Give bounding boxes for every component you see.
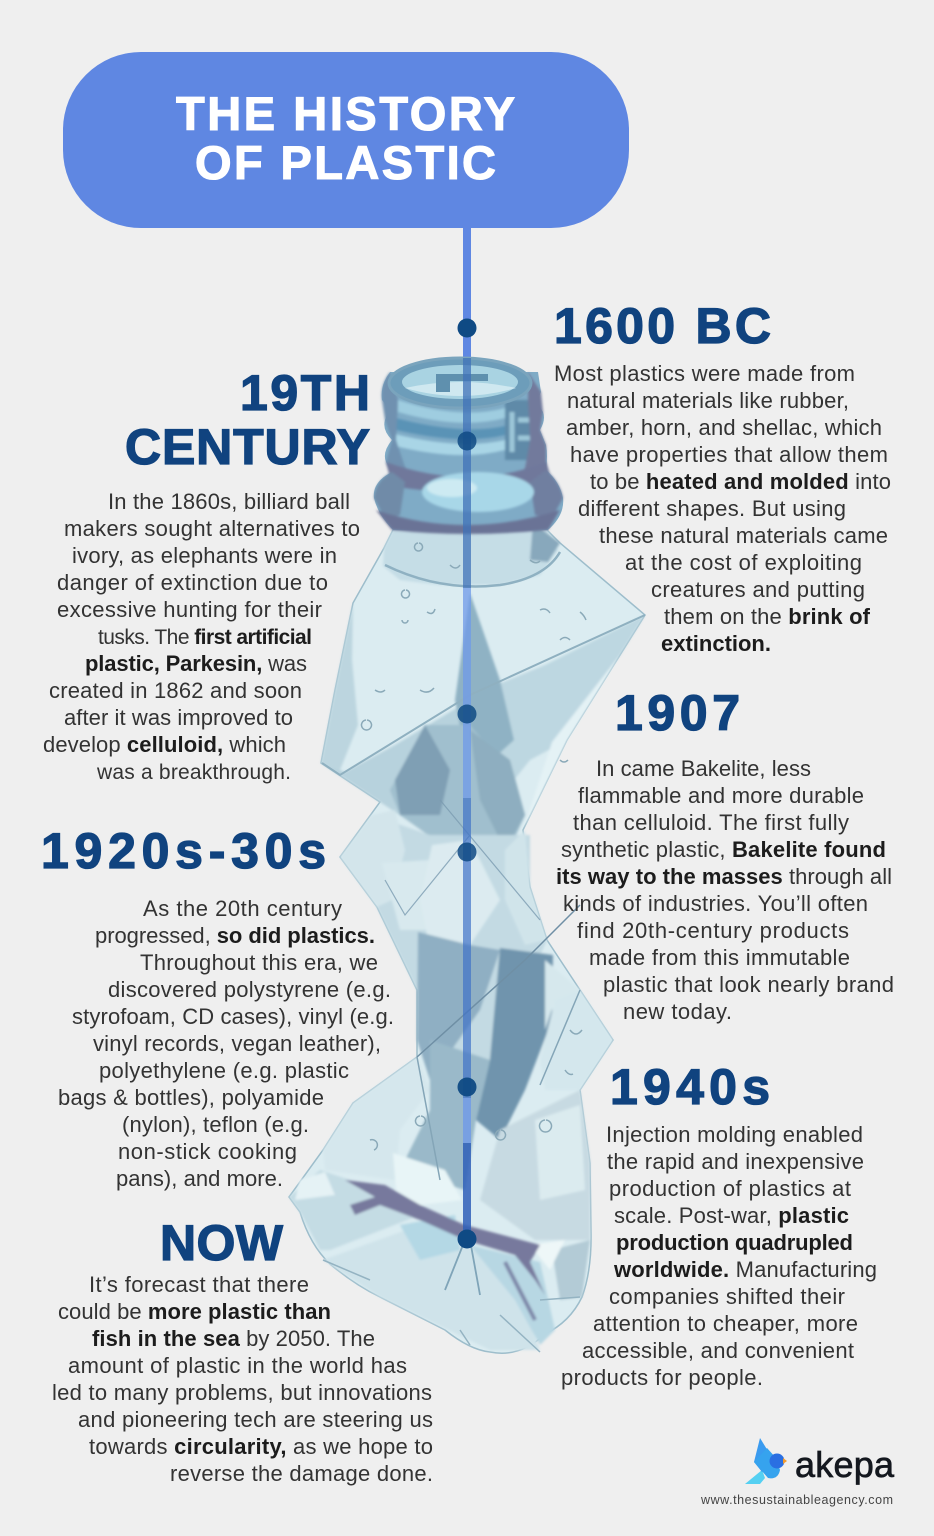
text: 1940s <box>561 1122 877 1390</box>
text: 1940s: Injection molding enabled <box>606 1122 863 1147</box>
heading: 1940s: 1940s <box>610 1059 770 1115</box>
text: now: could be more plastic than <box>58 1299 331 1324</box>
text: 1940s: production of plastics at <box>609 1176 851 1201</box>
heading: 1600 BC: 1600 BC <box>554 298 771 354</box>
text: 1600 BC: at the cost of exploiting <box>625 550 862 575</box>
thread bands <box>398 400 505 423</box>
text: 1940s: companies shifted their <box>609 1284 845 1309</box>
panel: 1940s <box>561 1059 877 1390</box>
text: 1600 BC: extinction. <box>661 631 771 656</box>
panel: 1920s-30s <box>41 823 394 1191</box>
text: 19th century: excessive hunting for their <box>57 597 322 622</box>
text: 19th century: tusks. The first artificial <box>98 626 312 649</box>
bottle mouth <box>389 358 531 408</box>
text: 19th century: plastic, Parkesin, was <box>85 651 307 676</box>
text: 1907: flammable and more durable <box>578 783 864 808</box>
heading: now: NOW <box>160 1215 284 1271</box>
text: 1600 BC: have properties that allow them <box>570 442 888 467</box>
text: 1600 BC: natural materials like rubber, <box>567 388 849 413</box>
text: 1920s-30s: discovered polystyrene (e.g. <box>108 977 391 1002</box>
logo: akepa <box>700 1438 895 1507</box>
text: 1920s-30s: As the 20th century <box>143 896 342 921</box>
left dark edge <box>382 372 406 472</box>
text: 1600 BC: them on the brink of <box>664 604 871 629</box>
text: now: amount of plastic in the world has <box>68 1353 407 1378</box>
text: 1940s: scale. Post-war, plastic <box>614 1203 849 1228</box>
text: 1920s-30s: non-stick cooking <box>118 1139 297 1164</box>
text: 1920s-30s: pans), and more. <box>116 1166 283 1191</box>
text: 1907: plastic that look nearly brand <box>603 972 894 997</box>
heading: 19th century: 19TH <box>240 365 370 421</box>
illustration: crushed plastic bottle <box>289 358 645 1353</box>
text: 1907: kinds of industries. You’ll often <box>563 891 868 916</box>
text: 1907: made from this immutable <box>589 945 850 970</box>
text: 1907: In came Bakelite, less <box>596 756 811 781</box>
url: www.thesustainableagency.com <box>700 1493 893 1507</box>
text: 1907: find 20th-century products <box>577 918 849 943</box>
text: 1920s-30s <box>58 896 394 1191</box>
text: 1907: synthetic plastic, Bakelite found <box>561 837 886 862</box>
left shoulder panel <box>321 603 358 770</box>
title: THE HISTORY <box>176 87 515 140</box>
text: 19th century: after it was improved to <box>64 705 293 730</box>
text: 1907: new today. <box>623 999 732 1024</box>
neck threads <box>374 372 563 530</box>
text: 1920s-30s: styrofoam, CD cases), vinyl (e.g. <box>72 1004 394 1029</box>
text: 1940s: the rapid and inexpensive <box>607 1149 864 1174</box>
text: 1600 BC <box>554 361 891 656</box>
text: 1920s-30s: polyethylene (e.g. plastic <box>99 1058 349 1083</box>
text: now: fish in the sea by 2050. The <box>92 1326 375 1351</box>
text: now: towards circularity, as we hope to <box>89 1434 433 1459</box>
timeline line: upper <box>463 228 471 358</box>
bottle silhouette <box>289 530 645 1353</box>
text: 1940s: attention to cheaper, more <box>593 1311 858 1336</box>
purple crease <box>345 1180 545 1295</box>
text: 19th century: created in 1862 and soon <box>49 678 302 703</box>
title pill <box>63 52 629 228</box>
shoulder shading <box>383 530 558 585</box>
text: 1920s-30s: Throughout this era, we <box>140 950 378 975</box>
heading: 19th century <box>125 365 370 475</box>
panel: 19th century <box>43 365 370 784</box>
icon: bird <box>745 1438 787 1484</box>
wordmark: akepa <box>795 1444 895 1485</box>
text: 1907: its way to the masses through all <box>556 864 892 889</box>
text: 19th century: was a breakthrough. <box>96 761 291 784</box>
timeline line: over bottle <box>463 358 471 1239</box>
text: now: led to many problems, but innovations <box>52 1380 432 1405</box>
text: 19th century: makers sought alternatives to <box>64 516 360 541</box>
text: 19th century: danger of extinction due to <box>57 570 328 595</box>
timeline dots <box>458 318 476 1248</box>
text: 1600 BC: to be heated and molded into <box>590 469 891 494</box>
text: 1907: than celluloid. The first fully <box>573 810 849 835</box>
panel: 1600 BC <box>554 298 891 656</box>
text: 19th century: In the 1860s, billiard ball <box>108 489 350 514</box>
text: 1940s: products for people. <box>561 1365 763 1390</box>
text: 1600 BC: Most plastics were made from <box>554 361 855 386</box>
panel: 1907 <box>556 685 894 1024</box>
text: 1600 BC: amber, horn, and shellac, which <box>566 415 882 440</box>
text: 19th century <box>43 489 360 784</box>
text: 1940s: worldwide. Manufacturing <box>613 1257 877 1282</box>
text: 1600 BC: these natural materials came <box>599 523 888 548</box>
text: 1940s: accessible, and convenient <box>582 1338 854 1363</box>
text: 1600 BC: different shapes. But using <box>578 496 846 521</box>
text: 1920s-30s: (nylon), teflon (e.g. <box>122 1112 309 1137</box>
text: 1920s-30s: vinyl records, vegan leather), <box>93 1031 381 1056</box>
text: 1920s-30s: bags & bottles), polyamide <box>58 1085 324 1110</box>
twist: dark folds <box>417 932 500 1080</box>
text: 19th century: ivory, as elephants were in <box>72 543 337 568</box>
text: 1600 BC: creatures and putting <box>651 577 865 602</box>
fold lines <box>322 615 645 775</box>
base: pale panels <box>323 1057 430 1180</box>
right fold panel <box>466 615 645 810</box>
neck flange <box>374 462 563 534</box>
text: now: It’s forecast that there <box>89 1272 309 1297</box>
text: now: reverse the damage done. <box>170 1461 433 1486</box>
text: 1907 <box>556 756 894 1024</box>
heading: 1907: 1907 <box>615 685 740 741</box>
water droplets <box>362 543 586 1150</box>
lower shoulder fold <box>321 700 470 835</box>
heading: 19th century: CENTURY <box>125 419 370 475</box>
title: OF PLASTIC <box>195 136 496 189</box>
text: now: and pioneering tech are steering us <box>78 1407 433 1432</box>
panel: now <box>52 1215 433 1486</box>
right purple edge <box>524 372 546 474</box>
text: now <box>52 1272 433 1486</box>
heading: 1920s-30s: 1920s-30s <box>41 823 326 879</box>
twist: mid body <box>340 815 547 1090</box>
text: 1920s-30s: progressed, so did plastics. <box>95 923 375 948</box>
text: 1940s: production quadrupled <box>616 1230 853 1255</box>
text: 19th century: develop celluloid, which <box>43 732 286 757</box>
